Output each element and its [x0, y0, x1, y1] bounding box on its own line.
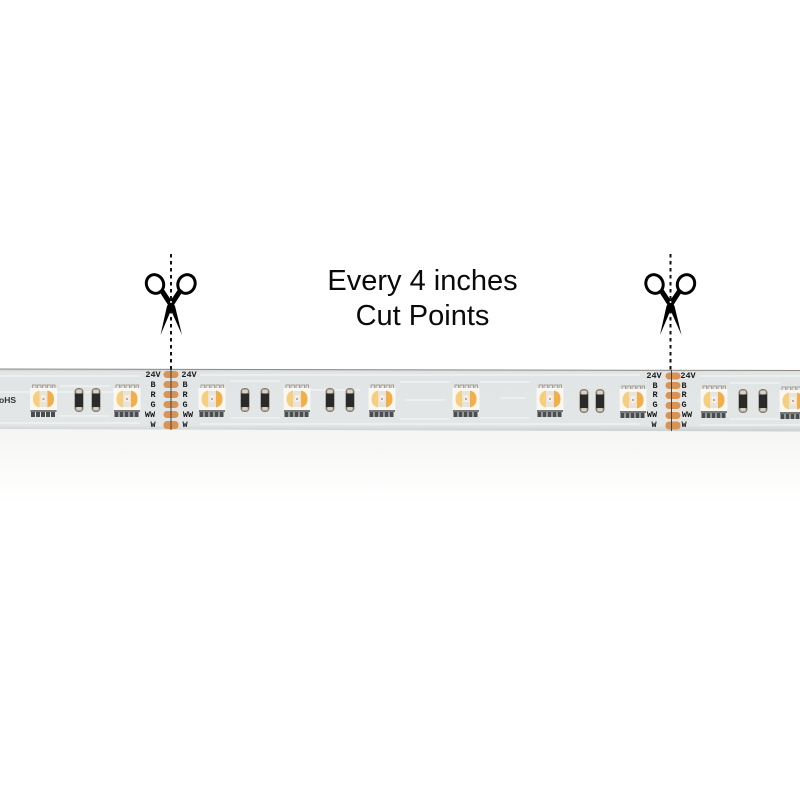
pad labels: W — [651, 420, 657, 430]
pad labels: R — [681, 390, 687, 400]
pad labels: WW — [682, 410, 693, 420]
pad labels: WW — [647, 410, 658, 420]
cut line — [170, 369, 172, 430]
title: cut point caption: Every 4 inches — [327, 265, 518, 297]
pad labels: W — [681, 420, 687, 430]
solder pads — [666, 372, 680, 430]
pad labels: B — [681, 381, 687, 391]
pad labels: 24V — [181, 370, 198, 380]
top edge line — [0, 369, 800, 370]
LEDs — [30, 385, 140, 417]
pad labels: G — [652, 400, 658, 410]
pad labels: 24V — [680, 371, 697, 381]
icon: right scissors — [643, 272, 698, 335]
solder pads — [164, 371, 178, 429]
resistor pairs — [74, 388, 768, 413]
pad labels: R — [150, 390, 156, 400]
pad labels: WW — [183, 410, 194, 420]
cut line — [671, 370, 672, 431]
pad labels: B — [150, 380, 156, 390]
strip soft shadow — [0, 429, 800, 504]
title: cut point caption: Cut Points — [356, 300, 489, 332]
pad labels: R — [652, 390, 658, 400]
remaining LEDs — [198, 385, 800, 419]
pad labels — [646, 371, 697, 430]
pad labels: W — [182, 420, 188, 430]
pad labels: R — [182, 390, 188, 400]
right dotted cut line — [670, 254, 672, 370]
left solder pads and labels — [145, 369, 198, 430]
pad labels: 24V — [646, 371, 663, 381]
LED strip — [0, 369, 800, 432]
pad labels: W — [150, 420, 156, 430]
left LED group — [0, 385, 140, 417]
pad labels: 24V — [145, 370, 162, 380]
pad labels: WW — [145, 410, 156, 420]
pad labels: B — [652, 381, 658, 391]
left dotted cut line — [170, 254, 172, 370]
title: cut point caption — [327, 265, 518, 332]
pad labels: G — [681, 400, 687, 410]
pad labels — [145, 370, 198, 430]
right solder pads and labels — [646, 370, 697, 431]
circuit traces — [0, 375, 800, 425]
pad labels: G — [150, 400, 156, 410]
icon: left scissors — [143, 272, 198, 335]
pad labels: G — [182, 400, 188, 410]
strip board — [0, 369, 800, 432]
pad labels: B — [182, 380, 188, 390]
